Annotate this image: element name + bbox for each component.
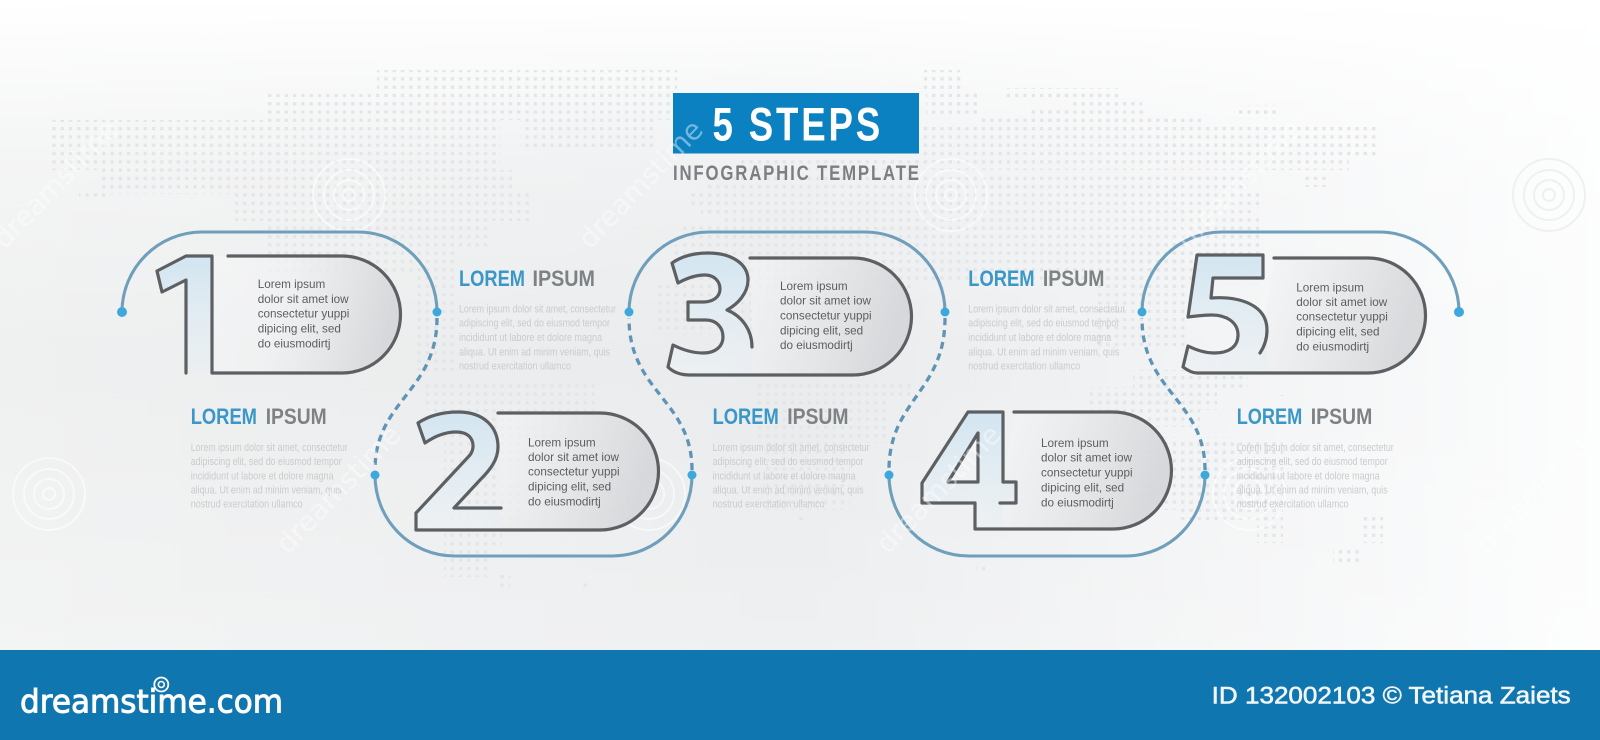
text block: step 2 <box>459 266 616 372</box>
text block: step 3: adipiscing elit, sed do eiusmod tempor <box>713 456 864 468</box>
subtitle: INFOGRAPHIC TEMPLATE <box>673 162 919 186</box>
text block: step 4: aliqua. Ut enim ad minim veniam, quis <box>968 346 1120 358</box>
text block: step 4: adipiscing elit, sed do eiusmod tempor <box>968 318 1120 330</box>
diagonal watermark text: dreamstime <box>269 418 408 560</box>
step 2 badge: dolor sit amet iow <box>528 451 619 464</box>
step 1 badge <box>157 256 401 373</box>
step 5 badge: Lorem ipsum <box>1296 281 1364 294</box>
step 4 badge: dolor sit amet iow <box>1041 452 1132 465</box>
watermark <box>13 159 1585 530</box>
text block: step 3: nostrud exercitation ullamco <box>713 499 825 511</box>
text block: step 2: IPSUM <box>532 266 595 291</box>
text block: step 5: Lorem ipsum dolor sit amet, consectetur <box>1237 442 1394 454</box>
connecting line <box>122 232 1459 556</box>
text block: step 4 <box>968 266 1126 372</box>
diagonal watermark text: dreamstime <box>869 418 1008 560</box>
text block: step 3: IPSUM <box>787 404 848 429</box>
text block: step 3: incididunt ut labore et dolore magna <box>713 470 856 482</box>
step 2 badge: consectetur yuppi <box>528 466 620 479</box>
text block: step 5: incididunt ut labore et dolore magna <box>1237 470 1380 482</box>
text block: step 1: LOREM <box>191 404 257 429</box>
text block: step 1: Lorem ipsum dolor sit amet, consectetur <box>191 442 348 454</box>
text block: step 5: IPSUM <box>1311 404 1372 429</box>
text block: step 5: aliqua. Ut enim ad minim veniam, quis <box>1237 485 1388 497</box>
text block: step 5: adipiscing elit, sed do eiusmod tempor <box>1237 456 1388 468</box>
text block: step 4: IPSUM <box>1043 266 1104 291</box>
step 3 badge: consectetur yuppi <box>780 310 872 323</box>
step 5 badge <box>1183 255 1426 373</box>
title block <box>673 93 919 186</box>
connector dots <box>117 307 1464 480</box>
text block: step 2: adipiscing elit, sed do eiusmod tempor <box>459 318 610 330</box>
footer bar <box>0 650 1600 740</box>
footer credit: ID 132002103 © Tetiana Zaiets <box>1212 682 1571 710</box>
text block: step 4: incididunt ut labore et dolore magna <box>968 332 1112 344</box>
step 2 badge: do eiusmodirtj <box>528 495 601 508</box>
text block: step 1: adipiscing elit, sed do eiusmod tempor <box>191 456 342 468</box>
title banner <box>673 93 919 154</box>
text block: step 2: Lorem ipsum dolor sit amet, consectetur <box>459 304 616 316</box>
text block: step 3: LOREM <box>713 404 779 429</box>
text block: step 3 <box>713 404 870 511</box>
text block: step 1: incididunt ut labore et dolore magna <box>191 470 334 482</box>
step 5 badge: dolor sit amet iow <box>1296 296 1388 309</box>
text block: step 1: aliqua. Ut enim ad minim veniam, quis <box>191 485 342 497</box>
text block: step 1 <box>191 404 348 511</box>
text block: step 1: nostrud exercitation ullamco <box>191 499 303 511</box>
step 1 badge: dipicing elit, sed <box>258 323 341 336</box>
diagonal watermark text: dreamstime <box>1169 113 1308 255</box>
text block: step 1: IPSUM <box>266 404 327 429</box>
text block: step 5: nostrud exercitation ullamco <box>1237 499 1349 511</box>
step 3 badge: dolor sit amet iow <box>780 295 871 308</box>
step 5 badge: dipicing elit, sed <box>1296 326 1379 339</box>
step 2 badge: Lorem ipsum <box>528 436 596 449</box>
step 5 badge: do eiusmodirtj <box>1296 340 1369 353</box>
text block: step 3: Lorem ipsum dolor sit amet, consectetur <box>713 442 870 454</box>
diagonal watermark text: dreamstime <box>571 113 710 255</box>
text block: step 4: LOREM <box>968 266 1034 291</box>
step 4 badge <box>922 412 1171 529</box>
dotted world map <box>51 70 1383 590</box>
diagonal watermark text <box>0 113 1600 560</box>
step 1 badge: do eiusmodirtj <box>258 337 330 350</box>
text block: step 2: aliqua. Ut enim ad minim veniam, quis <box>459 346 610 358</box>
text block: step 2: LOREM <box>459 266 525 291</box>
text block: step 4: Lorem ipsum dolor sit amet, consectetur <box>968 304 1126 316</box>
step 3 badge: do eiusmodirtj <box>780 339 853 352</box>
text block: step 4: nostrud exercitation ullamco <box>968 360 1080 372</box>
text block: step 5: LOREM <box>1237 404 1302 429</box>
step 1 badge: Lorem ipsum <box>258 278 325 291</box>
step 3 badge: dipicing elit, sed <box>780 324 863 337</box>
text block: step 2: incididunt ut labore et dolore magna <box>459 332 603 344</box>
step 4 badge: dipicing elit, sed <box>1041 481 1124 494</box>
text block: step 3: aliqua. Ut enim ad minim veniam, quis <box>713 485 864 497</box>
title text: 5 STEPS <box>712 98 880 151</box>
step 3 badge <box>668 253 912 375</box>
step 4 badge: consectetur yuppi <box>1041 467 1133 480</box>
step 4 badge: Lorem ipsum <box>1041 437 1109 450</box>
text block: step 2: nostrud exercitation ullamco <box>459 360 571 372</box>
step 1 badge: dolor sit amet iow <box>258 293 349 306</box>
step 1 badge: consectetur yuppi <box>258 308 349 321</box>
step 5 badge: consectetur yuppi <box>1296 311 1388 324</box>
step 4 badge: do eiusmodirtj <box>1041 496 1114 509</box>
step 2 badge <box>416 412 658 530</box>
footer logo: dreamstime.com <box>20 682 283 720</box>
step 2 badge: dipicing elit, sed <box>528 481 611 494</box>
text block: step 5 <box>1237 404 1394 511</box>
step 3 badge: Lorem ipsum <box>780 280 848 293</box>
